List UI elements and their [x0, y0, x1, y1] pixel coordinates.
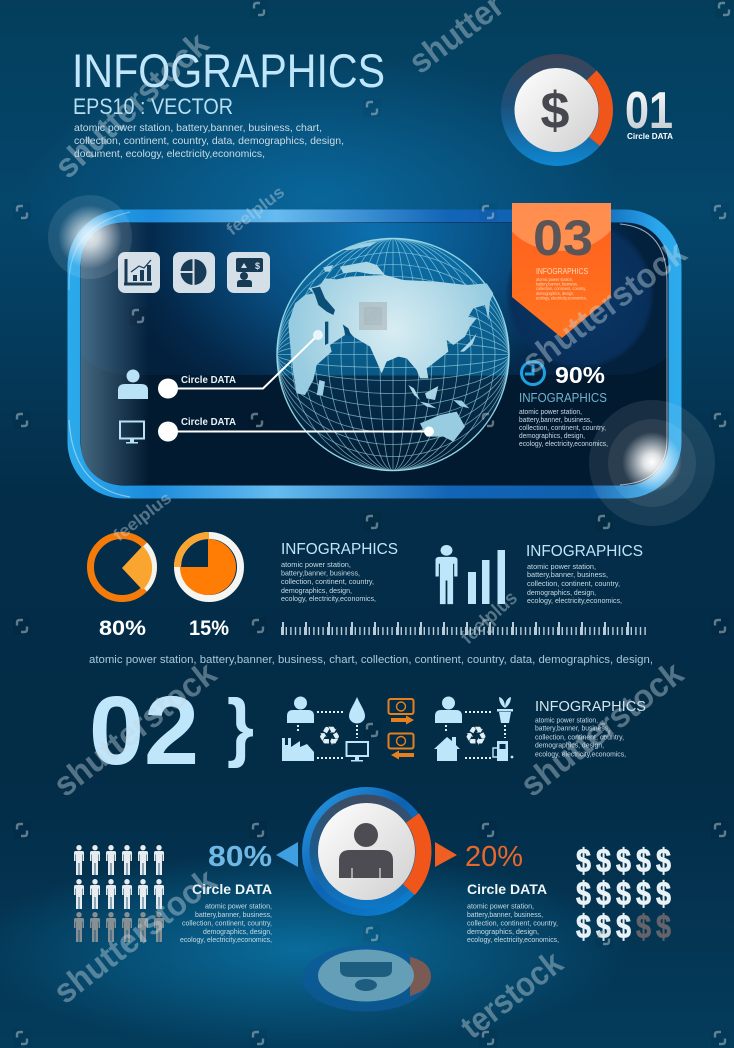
watermark: shutterstock text: shutterstock [48, 25, 216, 186]
stat: 80%: atomic power station, [205, 902, 272, 910]
icon: money in [388, 734, 414, 760]
text block: infographics 2: ecology, electricity,economics, [527, 596, 622, 605]
dollar pictogram: $ [616, 875, 631, 912]
icon: monitor [346, 742, 368, 762]
connector: user to globe [158, 330, 323, 398]
dollar pictogram: $ [596, 875, 611, 912]
watermark: feelplus text: feelplus [110, 488, 175, 545]
icon: factory [282, 738, 314, 761]
title: INFOGRAPHICS [72, 44, 385, 97]
icon: presenter tile [227, 252, 270, 293]
stat: 80%: demographics, design, [203, 927, 272, 936]
stat: 90%: 90% [555, 362, 605, 388]
stat: 20%: collection, continent, country, [467, 918, 558, 928]
text block: infographics 1: demographics, design, [281, 586, 352, 595]
stat: 80% [180, 841, 298, 944]
reflection of central circle [302, 946, 431, 1012]
stat: 90%: ecology, electricity,economics, [519, 439, 608, 448]
stat: 80%: 80% [208, 841, 272, 873]
lens flare: bottom right [589, 400, 715, 526]
icon: person [435, 696, 462, 723]
stat: 20%: demographics, design, [467, 927, 539, 936]
icon: person [339, 823, 393, 878]
globe [277, 238, 509, 470]
central person circle [302, 787, 431, 916]
stat: 90%: atomic power station, [519, 407, 582, 416]
dollar pictogram: $ [576, 875, 591, 912]
connector dots [446, 712, 505, 758]
ribbon 03: INFOGRAPHICS [536, 266, 588, 276]
globe seas [312, 287, 352, 345]
stat: 80%: collection, continent, country, [182, 918, 272, 928]
watermark: shutterstock text: shutterstock [47, 654, 224, 804]
text block: infographics 2: atomic power station, [527, 562, 596, 571]
connector: monitor to globe: Circle DATA [181, 416, 236, 428]
panel interior [81, 223, 667, 485]
flow diagram 2 [434, 696, 513, 761]
text block: infographics 3: INFOGRAPHICS [535, 698, 646, 715]
donut chart 15% [178, 536, 240, 640]
watermark: shutterstock text: shutterstock [47, 861, 224, 1011]
connector: monitor to globe [158, 416, 434, 442]
intro text block: document, ecology, electricity,economics, [74, 148, 265, 160]
icon: chart tile [118, 252, 160, 293]
icon: user [118, 370, 148, 399]
stat: 90%: collection, continent, country, [519, 423, 606, 432]
donut chart 80% [90, 536, 154, 640]
stat: 80%: battery,banner, business, [195, 910, 272, 919]
stat: 90%: battery,banner, business, [519, 415, 592, 424]
stat: 20%: battery,banner, business, [467, 910, 543, 919]
text block: infographics 3: battery,banner, business, [535, 724, 610, 732]
stat: 90%: demographics, design, [519, 431, 585, 440]
badge: dollar circle 01 [501, 54, 673, 166]
icon: person [287, 696, 314, 723]
globe parallels [277, 252, 509, 456]
dollar pictogram: $ [656, 875, 671, 912]
panel frame [74, 216, 675, 492]
dollar pictogram: $ [596, 908, 611, 945]
icon: recycle: ♻ [464, 722, 488, 752]
big number 02: 02 [89, 676, 199, 785]
dollar pictogram [576, 842, 671, 945]
text block: infographics 3: demographics, design, [535, 740, 604, 750]
icon: money out [388, 699, 414, 724]
money exchange icons [388, 699, 414, 760]
dollar pictogram: $ [616, 908, 631, 945]
text block: infographics 1: collection, continent, country, [281, 577, 374, 586]
watermark: feelplus text: feelplus [223, 182, 288, 239]
dollar pictogram: $ [576, 842, 591, 879]
text block: infographics 2: collection, continent, country, [527, 579, 620, 588]
icon: recycle: ♻ [318, 722, 341, 752]
globe meridians [291, 238, 495, 470]
tick scale [281, 628, 649, 631]
stat: 90% [519, 362, 608, 448]
stat: 90%: INFOGRAPHICS [519, 391, 607, 405]
lens flare: top left [48, 195, 132, 279]
ribbon 03: collection, continent, country, [536, 286, 586, 291]
badge: dollar circle 01: Circle DATA [627, 132, 673, 141]
icon: house [434, 737, 460, 761]
dollar pictogram: $ [616, 842, 631, 879]
globe continents [288, 242, 493, 442]
dollar pictogram: $ [636, 842, 651, 879]
text block: infographics 2: battery,banner, business, [527, 570, 608, 579]
keyword sentence: atomic power station, battery,banner, business, chart, collection, continent, country, data, demographics, design, [89, 654, 653, 666]
ribbon 03: atomic power station, [536, 277, 573, 282]
badge: dollar circle 01: $ [541, 82, 570, 140]
text block: infographics 3 [535, 698, 646, 758]
connector dots [298, 712, 357, 758]
text block: infographics 1: battery,banner, business, [281, 568, 360, 578]
text block: infographics 3: atomic power station, [535, 716, 598, 724]
dollar pictogram: $ [576, 908, 591, 945]
stat: 80%: ecology, electricity,economics, [180, 935, 272, 944]
intro text block [74, 122, 344, 160]
ribbon 03 [512, 203, 611, 338]
icon: pie tile [173, 252, 215, 293]
people pictogram [74, 845, 164, 942]
stat: 20% [435, 841, 559, 944]
text block: infographics 2: demographics, design, [527, 588, 596, 597]
badge: dollar circle 01: 01 [625, 82, 673, 140]
icon: water drop [349, 697, 365, 724]
text block: infographics 1: INFOGRAPHICS [281, 541, 398, 558]
watermark: shutterstock text: shutterstock [514, 654, 691, 804]
icon: fuel pump [493, 741, 513, 761]
text block: infographics 1: atomic power station, [281, 560, 351, 569]
watermark: feelplus text: feelplus [457, 587, 522, 649]
donut chart 80%: 80% [99, 617, 146, 640]
watermark: shutterstock text: shutterstock [515, 234, 694, 381]
icon: potted plant [497, 697, 513, 723]
text block: infographics 1 [281, 541, 398, 603]
connector: user to globe: Circle DATA [181, 374, 236, 386]
watermark: shutterstock text: terstock [454, 944, 570, 1046]
stat: 20%: ecology, electricity,economics, [467, 935, 559, 944]
dollar pictogram: $ [596, 842, 611, 879]
closing brace: } [227, 684, 254, 769]
stat: 20%: Circle DATA [467, 881, 547, 897]
ribbon 03: demographics, design, [536, 291, 574, 296]
subtitle: EPS10 : VECTOR [73, 94, 233, 119]
intro text block: atomic power station, battery,banner, business, chart, [74, 122, 322, 134]
ribbon 03: 03 [533, 210, 593, 266]
main panel [48, 159, 715, 526]
intro text block: collection, continent, country, data, demographics, design, [74, 135, 344, 147]
icon: person with bar chart [436, 545, 505, 604]
dollar pictogram: $ [636, 908, 651, 945]
donut chart 15%: 15% [189, 617, 229, 640]
icon: monitor [120, 422, 144, 444]
stat: 20%: 20% [465, 841, 523, 873]
text block: infographics 3: collection, continent, country, [535, 732, 624, 742]
dollar pictogram: $ [656, 908, 671, 945]
stat: 80%: Circle DATA [192, 881, 272, 897]
text block: infographics 1: ecology, electricity,economics, [281, 594, 376, 603]
ribbon 03: battery,banner, business, [536, 282, 578, 286]
dollar pictogram: $ [636, 875, 651, 912]
text block: infographics 3: ecology, electricity,economics, [535, 750, 626, 758]
text block: infographics 2: INFOGRAPHICS [526, 543, 643, 560]
dollar pictogram: $ [656, 842, 671, 879]
icon: presenter tile: $ [255, 261, 260, 271]
flow diagram 1 [282, 696, 368, 762]
ribbon 03: ecology, electricity,economics, [536, 296, 587, 300]
stat: 20%: atomic power station, [467, 902, 534, 910]
text block: infographics 2 [526, 543, 643, 605]
watermark: feelplus text [110, 182, 522, 649]
